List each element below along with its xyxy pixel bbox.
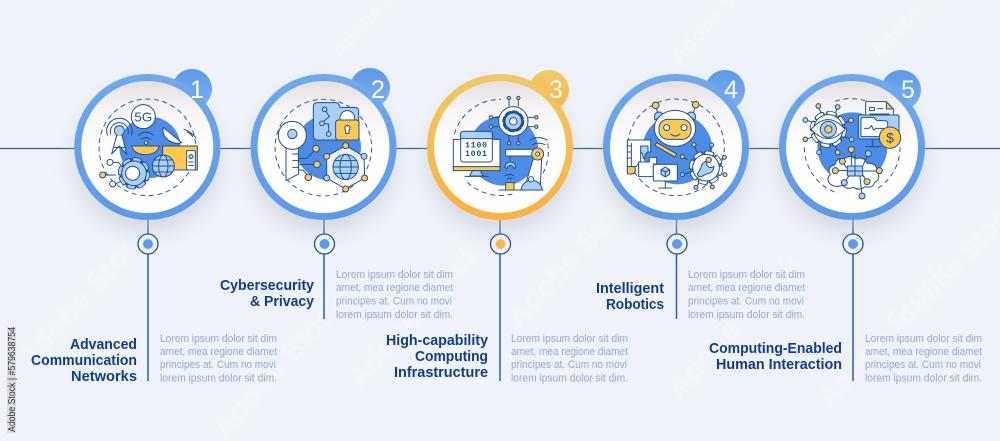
horizontal timeline: [0, 148, 1000, 150]
number: 3: [549, 76, 563, 104]
description: principes at. Cum no movi: [865, 359, 981, 371]
description: Lorem ipsum dolor sit dim: [160, 333, 277, 345]
title: Computing-Enabled: [709, 340, 842, 357]
icon: human interaction: $: [886, 130, 894, 146]
title: [596, 280, 664, 313]
ring: [250, 74, 396, 220]
description: [336, 269, 453, 321]
icon: computing infrastructure: 1100: [465, 140, 488, 150]
watermarks: Adobe Stock: [341, 236, 488, 395]
description: amet, mea regione diamet: [865, 346, 982, 358]
icon: cybersecurity: [275, 99, 372, 196]
stock id label: Adobe Stock | #579638754: [7, 327, 18, 432]
description: lorem ipsum dolor sit dim.: [688, 309, 805, 321]
title: & Privacy: [250, 293, 315, 310]
icon: human interaction: [803, 99, 901, 199]
description: [865, 333, 982, 384]
number badge: [705, 70, 745, 110]
description: lorem ipsum dolor sit dim.: [511, 372, 628, 384]
description: Lorem ipsum dolor sit dim: [511, 333, 628, 345]
description: principes at. Cum no movi: [511, 359, 627, 371]
title: High-capability: [386, 332, 489, 349]
watermarks: Adobe Stock: [206, 286, 353, 441]
title: Infrastructure: [394, 364, 488, 381]
watermarks: Adobe Stock: [661, 246, 808, 405]
description: [688, 269, 805, 321]
ring: [779, 74, 925, 220]
title: Networks: [71, 368, 137, 385]
title: Human Interaction: [716, 356, 842, 373]
title: Cybersecurity: [220, 277, 315, 294]
connector node: [138, 234, 158, 254]
title: [220, 277, 315, 310]
step 2: [220, 68, 453, 321]
ring: [603, 74, 749, 220]
number badge: [172, 69, 212, 109]
ring: [74, 74, 220, 220]
title: [386, 332, 489, 381]
ring: [427, 74, 573, 220]
number badge: [350, 68, 390, 108]
description: Lorem ipsum dolor sit dim: [336, 269, 453, 281]
number: 1: [190, 76, 204, 104]
description: Lorem ipsum dolor sit dim: [865, 333, 982, 345]
watermarks: Adobe Stock: [501, 176, 648, 335]
title: Communication: [31, 352, 137, 369]
number: 2: [371, 76, 385, 104]
icon: computing infrastructure: [453, 96, 548, 195]
icon: communication networks: [99, 99, 197, 196]
description: [160, 333, 277, 384]
number badge: [881, 70, 921, 110]
step 3: [386, 70, 628, 384]
description: amet, mea regione diamet: [336, 282, 453, 294]
title: [31, 336, 137, 385]
description: lorem ipsum dolor sit dim.: [865, 372, 982, 384]
title: Robotics: [606, 296, 664, 313]
description: lorem ipsum dolor sit dim.: [160, 372, 277, 384]
description: principes at. Cum no movi: [160, 359, 276, 371]
title: Advanced: [70, 336, 137, 353]
description: Lorem ipsum dolor sit dim: [688, 269, 805, 281]
number badge: [529, 70, 569, 110]
step 5: [709, 70, 982, 384]
connector node: [314, 234, 334, 254]
title: Computing: [415, 348, 488, 365]
description: amet, mea regione diamet: [160, 346, 277, 358]
icon: communication networks: 5G: [134, 109, 152, 124]
step 4: [596, 70, 805, 321]
connector node: [490, 234, 510, 254]
description: [511, 333, 628, 384]
title: Intelligent: [596, 280, 664, 297]
connector node: [667, 234, 687, 254]
watermarks: Adobe Stock: [811, 256, 958, 415]
icon: computing infrastructure: 1001: [465, 149, 488, 159]
description: amet, mea regione diamet: [511, 346, 628, 358]
description: lorem ipsum dolor sit dim.: [336, 309, 453, 321]
description: principes at. Cum no movi: [688, 296, 804, 308]
description: amet, mea regione diamet: [688, 282, 805, 294]
watermarks: Adobe Stock: [11, 216, 158, 375]
title: [709, 340, 842, 373]
step 1: [31, 69, 277, 385]
number: 5: [901, 76, 915, 104]
icon: intelligent robotics: [627, 99, 727, 196]
connector node: [843, 234, 863, 254]
description: principes at. Cum no movi: [336, 296, 452, 308]
number: 4: [724, 76, 738, 104]
